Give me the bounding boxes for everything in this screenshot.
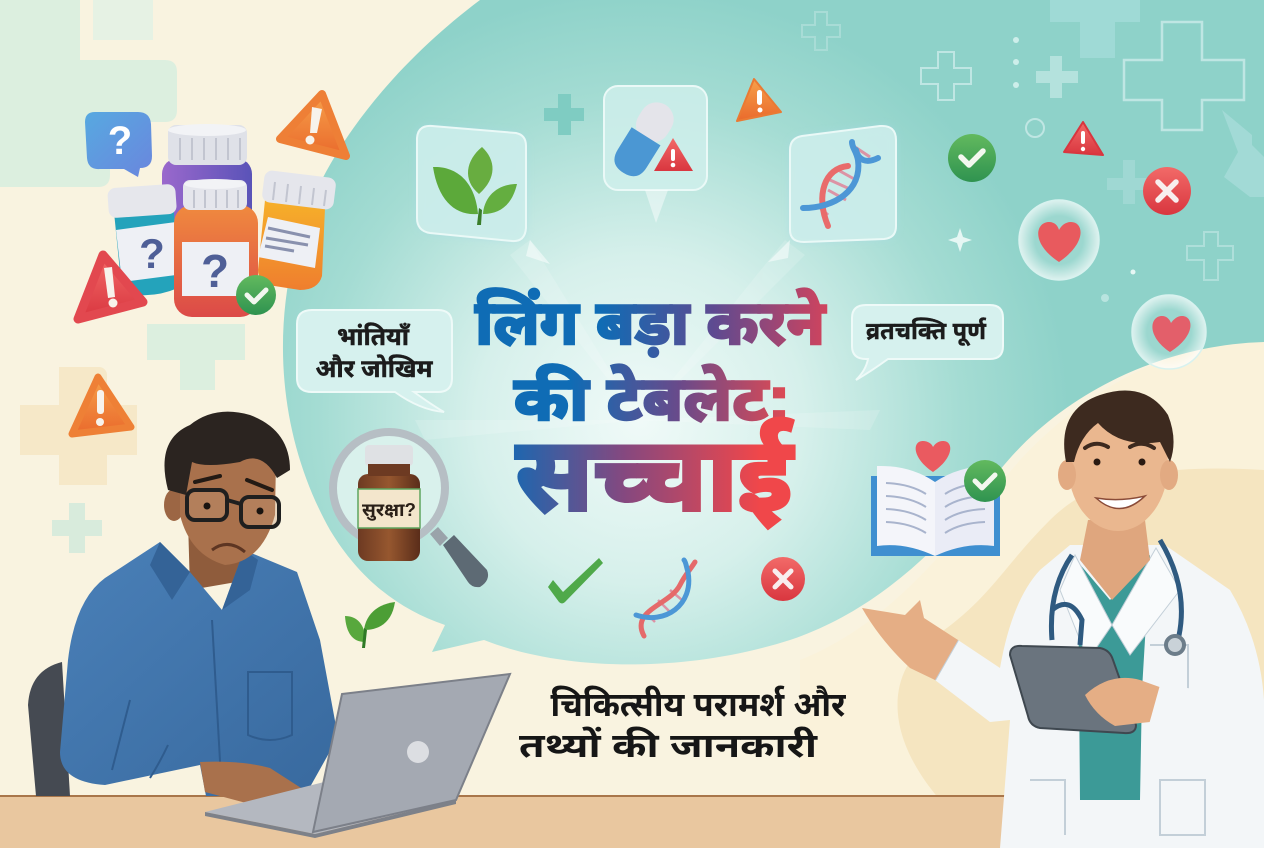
title: लिंग बड़ा करने bbox=[475, 287, 827, 358]
teal bottle with question mark: ? bbox=[139, 230, 165, 277]
background: light beams bbox=[415, 240, 880, 440]
icon: green check circle bbox=[948, 134, 996, 182]
background: warm hill behind doctor bbox=[800, 340, 1264, 800]
bottle bbox=[358, 445, 420, 561]
coat bbox=[935, 545, 1264, 848]
glasses bbox=[187, 490, 279, 527]
icon: blue question speech bubble: ? bbox=[108, 119, 132, 163]
tablet bbox=[1010, 646, 1136, 733]
background: top-right decorative crosses bbox=[802, 0, 1264, 302]
icon: small leaf sprig bbox=[345, 602, 395, 648]
panel: large teal speech bubble bbox=[283, 0, 1264, 664]
check badge bbox=[964, 460, 1006, 502]
icon: small orange warning triangle bbox=[737, 79, 781, 121]
panel: myths and risks speech bubble: और जोखिम bbox=[316, 354, 433, 383]
neck bbox=[1080, 520, 1150, 600]
icon: pill bottles group bbox=[107, 124, 337, 317]
icon: leaf glass card bbox=[417, 126, 550, 264]
shirt bbox=[60, 542, 338, 796]
icon: heart in bubble large bbox=[1019, 200, 1099, 280]
icon: teal plus bbox=[544, 94, 584, 135]
face bbox=[180, 440, 276, 565]
panel: right speech bubble bbox=[852, 305, 1003, 380]
icon: capsule glass card bbox=[604, 86, 707, 223]
icon: small DNA bbox=[636, 560, 695, 636]
illustration: worried man at laptop bbox=[28, 412, 338, 809]
title: सच्चाई bbox=[516, 418, 794, 532]
chair bbox=[28, 662, 70, 796]
hand bbox=[200, 762, 312, 809]
hair bbox=[164, 412, 290, 495]
text: safety label: सुरक्षा? bbox=[362, 500, 416, 521]
icon: magnifying glass with bottle bbox=[333, 432, 488, 587]
icon: orange warning triangle top bbox=[280, 94, 346, 156]
icon: red warning triangle bbox=[78, 255, 143, 319]
neck bbox=[188, 520, 248, 590]
leaves bbox=[433, 147, 517, 225]
text: myths and risks: भांतियाँ bbox=[337, 322, 411, 351]
text: medical consultation caption: तथ्यों की जानकारी bbox=[519, 726, 818, 765]
icon: open book with heart and check bbox=[871, 441, 1006, 556]
text: medical consultation caption: चिकित्सीय परामर्श और bbox=[550, 685, 846, 724]
purple bottle bbox=[162, 124, 252, 268]
text: medical consultation caption bbox=[519, 685, 846, 765]
illustration: laptop bbox=[205, 674, 510, 838]
icon: orange warning triangle left bbox=[72, 377, 131, 434]
head bbox=[1068, 399, 1168, 531]
yellow orange bottle with label bbox=[258, 170, 337, 290]
hair bbox=[1064, 390, 1174, 462]
desk bbox=[0, 795, 1264, 848]
background: pale medical crosses bbox=[0, 0, 245, 553]
background: beige blob behind doctor bbox=[898, 468, 1264, 800]
green check badge bbox=[236, 275, 276, 315]
icon: red cross circle lower bbox=[761, 557, 805, 601]
teal bottle with question mark bbox=[107, 184, 178, 295]
title: की टेबलेट: bbox=[514, 363, 790, 434]
orange bottle with question mark: ? bbox=[201, 245, 229, 297]
scrubs bbox=[1078, 555, 1150, 800]
icon: green tick bbox=[548, 558, 603, 604]
icon: blue question speech bubble bbox=[85, 112, 152, 177]
hand on tablet bbox=[1085, 678, 1168, 726]
gesture hand bbox=[862, 600, 958, 680]
face features bbox=[1085, 444, 1154, 509]
icon: heart in bubble small bbox=[1132, 295, 1206, 369]
illustration: doctor bbox=[862, 390, 1264, 848]
icon: red warning triangle right bbox=[1064, 122, 1103, 155]
ear bbox=[164, 489, 184, 521]
heart bbox=[916, 441, 950, 472]
text: right bubble label: व्रतचक्ति पूर्ण bbox=[866, 317, 987, 346]
brows and eyes bbox=[195, 476, 272, 490]
title bbox=[475, 287, 827, 532]
orange bottle with question mark bbox=[174, 179, 258, 317]
icon: red cross circle bbox=[1143, 167, 1191, 215]
icon: DNA glass card bbox=[768, 126, 896, 262]
stethoscope bbox=[1051, 540, 1184, 654]
panel: myths and risks speech bubble bbox=[297, 310, 452, 412]
